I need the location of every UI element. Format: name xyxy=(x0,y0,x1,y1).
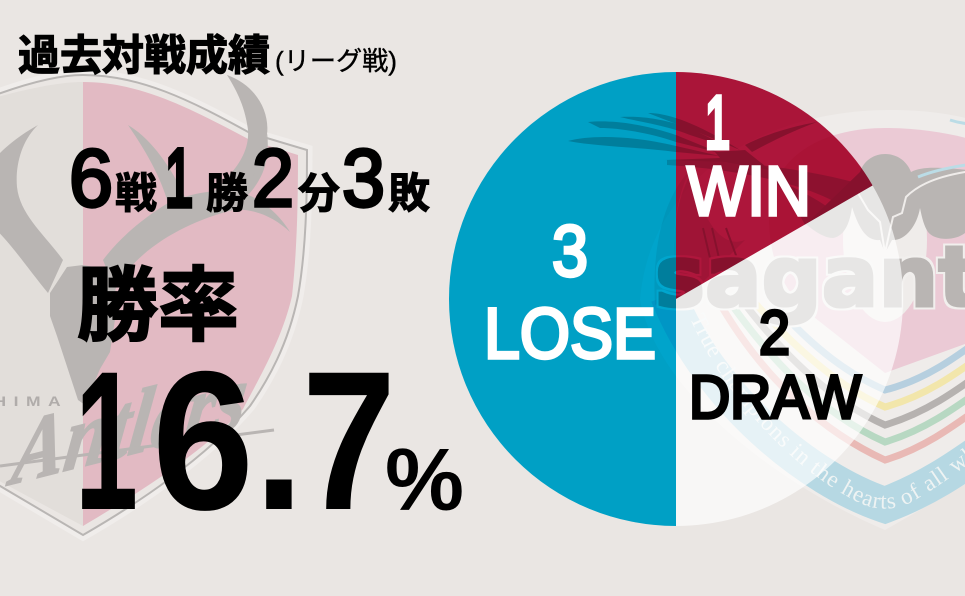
record: 6 games 1 win 2 draws 3 losses: 1 xyxy=(165,133,193,224)
pie label: draw xyxy=(689,299,861,431)
logo bands xyxy=(668,295,965,505)
logo bird xyxy=(806,120,965,253)
pie label: draw: 2 xyxy=(759,299,790,368)
win rate value: 1 xyxy=(75,330,138,551)
win rate value: 6 xyxy=(152,330,254,551)
logo body xyxy=(843,158,927,322)
record: 6 games 1 win 2 draws 3 losses: 戦 xyxy=(115,170,157,217)
title xyxy=(18,32,397,79)
logo feathers xyxy=(568,113,872,305)
logo: Sagan Tosu crest xyxy=(568,113,965,524)
pie slice: win xyxy=(676,72,873,299)
record: 6 games 1 win 2 draws 3 losses: 6 xyxy=(69,133,113,224)
logo text: Antlers: Antlers xyxy=(3,342,254,506)
pie chart xyxy=(449,72,903,526)
pie label: win: 1 xyxy=(705,81,730,164)
record: 6 games 1 win 2 draws 3 losses: 3 xyxy=(342,133,385,224)
logo: Kashima Antlers crest xyxy=(0,74,308,536)
win rate heading: 勝率 xyxy=(77,262,239,352)
pie label: draw: DRAW xyxy=(689,363,861,431)
pie slice: lose xyxy=(449,72,676,526)
win rate value: 7 xyxy=(302,330,396,551)
win rate value: % xyxy=(385,430,464,529)
win rate value: . xyxy=(254,330,304,551)
pie label: lose: LOSE xyxy=(484,295,656,374)
pie label: lose xyxy=(484,212,656,374)
pie slice: draw xyxy=(676,186,903,526)
title: 過去対戦成績 xyxy=(18,32,270,79)
record: 6 games 1 win 2 draws 3 losses: 敗 xyxy=(388,170,430,217)
record: 6 games 1 win 2 draws 3 losses xyxy=(69,133,430,224)
title: (リーグ戦) xyxy=(275,46,397,76)
pie label: win: WIN xyxy=(687,152,811,230)
win rate value xyxy=(75,330,464,551)
record: 6 games 1 win 2 draws 3 losses: 分 xyxy=(298,170,340,217)
pie label: lose: 3 xyxy=(552,212,588,292)
record: 6 games 1 win 2 draws 3 losses: 2 xyxy=(252,133,294,224)
record: 6 games 1 win 2 draws 3 losses: 勝 xyxy=(206,170,248,217)
pie label: win xyxy=(687,81,811,230)
